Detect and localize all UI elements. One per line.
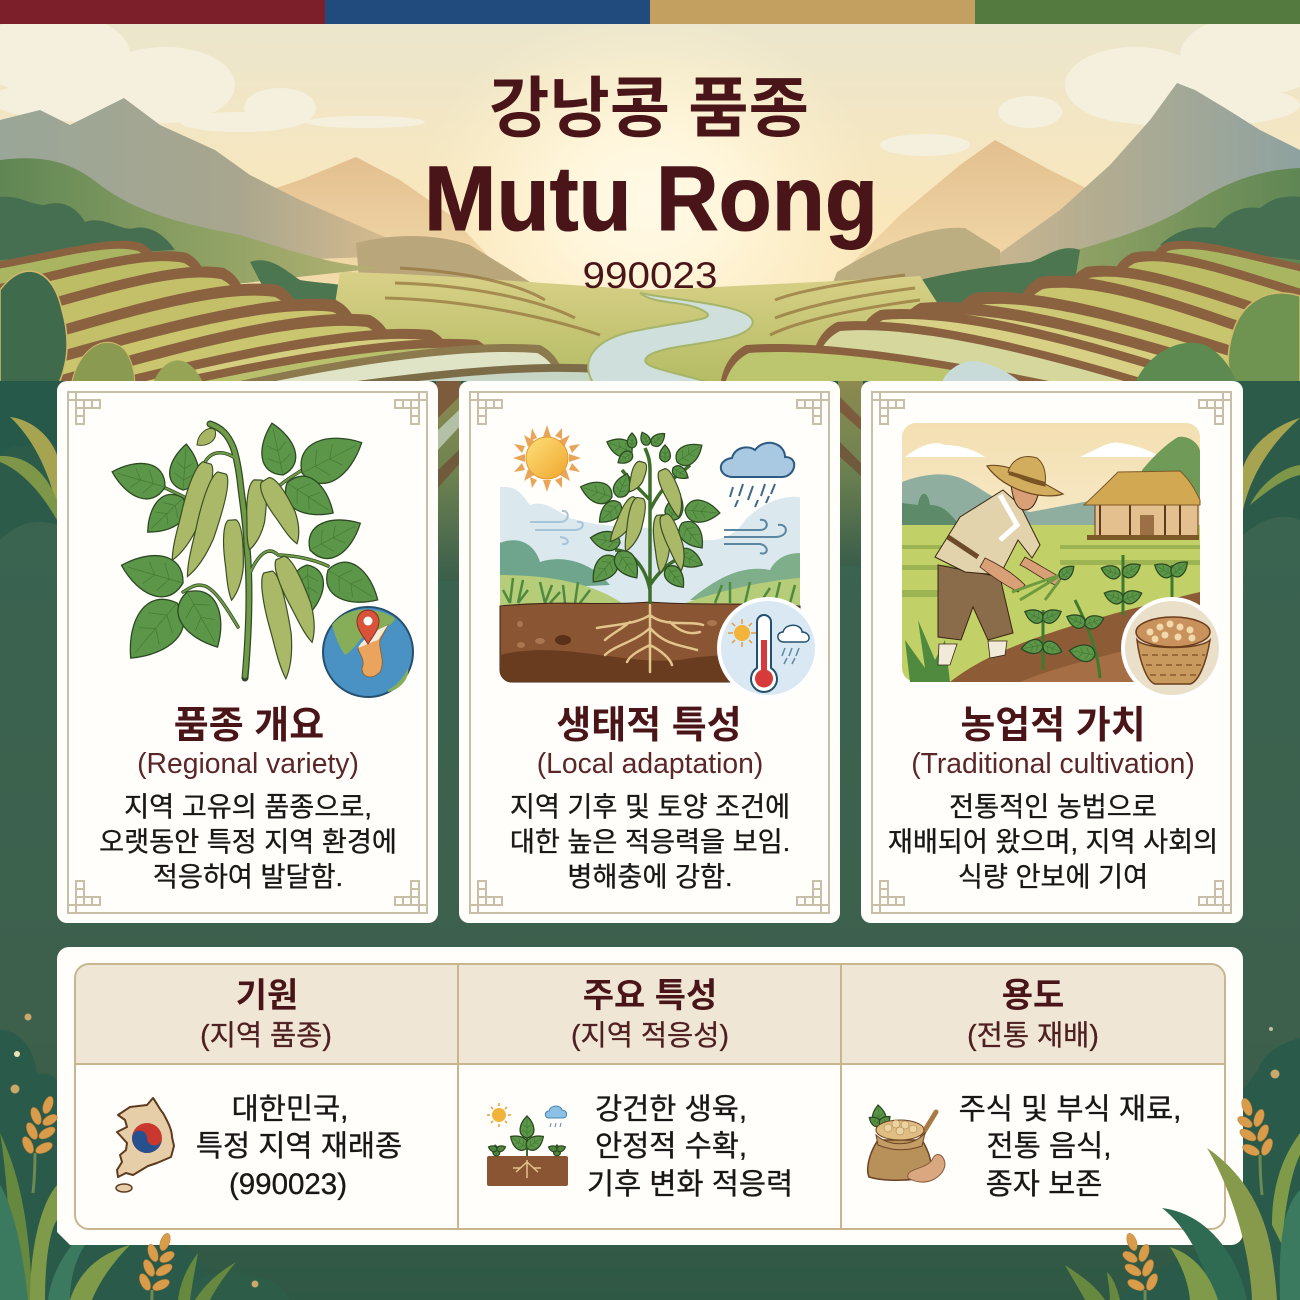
wheat bottom right [1121,1232,1160,1300]
field [902,525,1200,682]
plant leaves [577,430,721,592]
dark bush, right [1120,1038,1300,1300]
crop shoots [503,578,795,603]
card body text: 대한 높은 적응력을 보임. [510,826,790,857]
lower green ground [0,381,1300,1300]
card heading: 생태적 특성 [556,705,742,747]
straw hat [987,465,1063,496]
column 3: uses: 종자 보존 [986,1168,1102,1201]
foreground grass [905,620,950,682]
dark bush, bottom centre-left [180,1272,290,1300]
trousers [938,565,1013,640]
leaves [107,420,387,673]
face [1010,478,1040,510]
card 3: agricultural value [861,381,1243,923]
icon: sun [513,425,581,492]
stems [165,424,328,678]
column 2: key traits [487,977,793,1201]
card heading: 농업적 가치 [960,705,1146,747]
wheat left [20,1095,59,1193]
card subheading: (Traditional cultivation) [911,747,1195,779]
column 1: origin: 대한민국, [232,1093,348,1126]
title block [424,71,878,296]
column 3: uses: 전통 음식, [987,1130,1111,1163]
seedlings [1020,555,1191,678]
column 1: origin: 기원 [236,977,298,1015]
column 2: key traits: (지역 적응성) [571,1020,729,1052]
margin foliage, top left [0,381,57,540]
dark bush, left [0,1030,215,1300]
column 1: origin: 특정 지역 재래종 [196,1130,402,1163]
table header band [76,964,1224,1064]
hills [902,474,1095,525]
card body text: 지역 기후 및 토양 조건에 [510,791,790,822]
grass leaves right [1065,1133,1300,1300]
card body text: 지역 고유의 품종으로, [124,791,372,822]
card 2: ecological traits [459,381,840,923]
column 2: key traits: 주요 특성 [583,977,717,1015]
bottom foliage and wheat [0,1014,1300,1300]
trees behind house [1142,437,1200,500]
dots [10,1014,1280,1288]
top colour stripe [0,0,1300,24]
card body text: 재배되어 왔으며, 지역 사회의 [888,826,1218,857]
summary table panel [57,947,1243,1245]
card body text [510,791,790,892]
wheat bottom [137,1232,176,1300]
plant pods [607,460,693,573]
card subheading: (Regional variety) [137,747,359,779]
soil rows [950,592,1200,682]
column 2: key traits: 강건한 생육, [595,1093,747,1126]
back terraces [385,268,920,335]
column 1: origin: (990023) [229,1168,347,1201]
white leggings [938,641,1007,665]
margin foliage, top right [1243,381,1300,535]
arms [980,557,1062,592]
column 1: origin [116,977,402,1201]
card body text: 전통적인 농법으로 [949,791,1157,822]
icon: Korea map with taegeuk [116,1098,174,1192]
card body text: 병해충에 강함. [567,861,733,892]
illustration: bean plant [107,420,387,680]
clouds right [880,15,1300,156]
plant stem [615,448,690,604]
trees [0,271,67,392]
title: variety name: Mutu Rong [424,148,878,250]
card body text [888,791,1218,892]
icon: sack of beans [867,1104,945,1182]
column 3: uses: 용도 [1002,977,1064,1015]
icon: basket of beans badge [1123,599,1221,697]
icon: rain cloud [721,443,794,507]
title: accession number: 990023 [582,255,718,296]
icon: thermometer badge [719,599,817,697]
sky and hills [500,487,800,610]
central tan peaks [240,157,520,300]
left mountain [0,98,430,270]
card heading: 품종 개요 [174,705,324,747]
jacket [935,490,1040,575]
bud [197,428,216,445]
clouds [905,442,1160,457]
grass leaves left [0,1133,236,1300]
column 2: key traits: 안정적 수확, [595,1130,747,1163]
pods [168,460,327,680]
roots [597,605,703,672]
card body text: 적응하여 발달함. [153,861,343,892]
card body text: 식량 안보에 기여 [958,861,1148,892]
column 3: uses: (전통 재배) [967,1020,1099,1052]
card subheading: (Local adaptation) [537,747,763,779]
right mountain [880,83,1300,310]
right terraces [720,241,1300,452]
card body text [99,791,397,892]
illustration: plant, soil and weather [500,425,800,682]
gap between cards showing terraces [436,381,461,581]
river [588,293,753,392]
card body text: 오랫동안 특정 지역 환경에 [99,826,397,857]
clouds left [0,13,425,132]
column 1: origin: (지역 품종) [200,1020,332,1052]
wheat right [1236,1097,1275,1195]
central valley [320,272,1000,400]
column 3: uses [867,977,1181,1201]
thatched house [1084,471,1200,540]
title: Korean: 강낭콩 품종 [489,71,809,145]
sun glow [417,10,877,390]
bundle of seedlings [1012,575,1060,600]
farmer [935,457,1077,665]
icon: globe with location pin [323,607,413,697]
illustration: farmer in field [902,423,1200,682]
icon: seedling in soil [487,1103,568,1186]
soil [500,602,800,682]
green hills [0,158,380,310]
dark forests [0,197,175,260]
column 2: key traits: 기후 변화 적응력 [587,1168,793,1201]
distant low hills [356,236,530,290]
card 1: variety overview [57,381,438,923]
icon: wind lines [530,511,786,554]
left terraces [0,241,626,452]
column 3: uses: 주식 및 부식 재료, [959,1093,1181,1126]
